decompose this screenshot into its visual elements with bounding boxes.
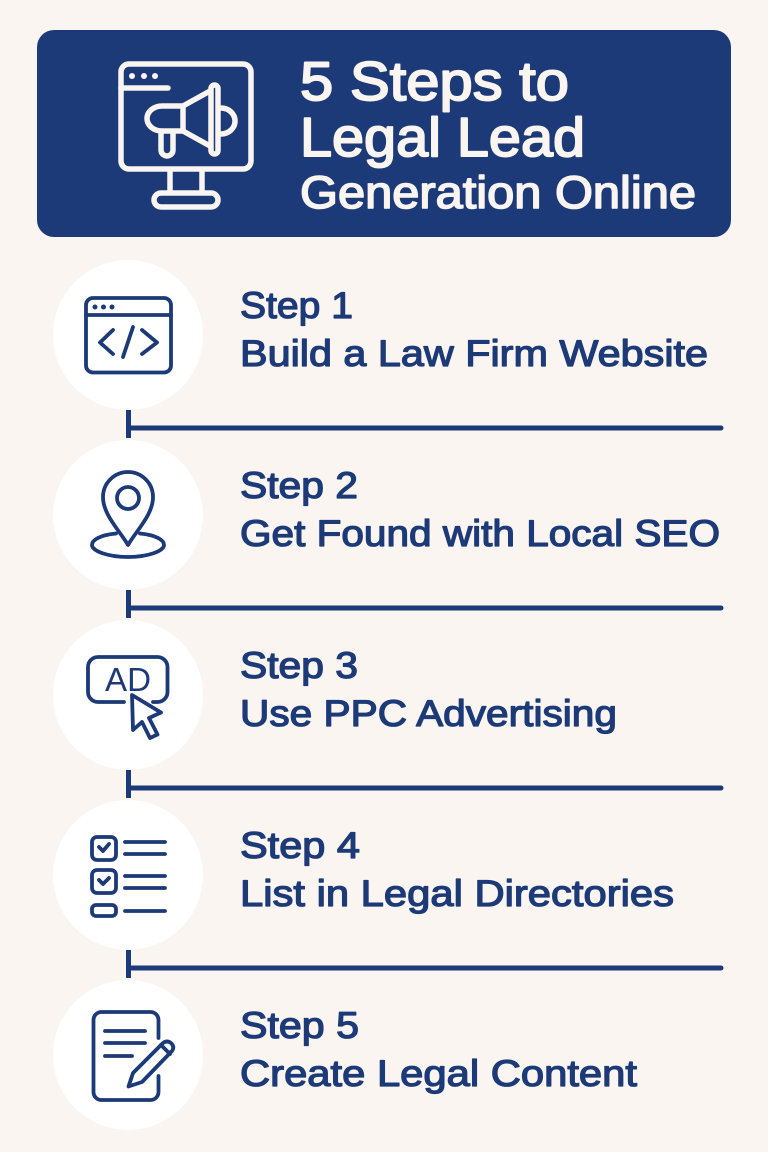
- icon: code window: [86, 298, 171, 372]
- icon: document and pencil: [94, 1012, 173, 1100]
- icon: AD click: [88, 657, 168, 738]
- step 2 text: Step 2: [240, 464, 358, 506]
- title: Generation Online: [300, 167, 696, 218]
- icon: checklist: [92, 837, 165, 916]
- step 5 text: [240, 1004, 638, 1094]
- step 3 text: Step 3: [240, 644, 358, 686]
- step 5 text: Step 5: [240, 1004, 359, 1046]
- icon: location pin: [92, 472, 164, 557]
- step 4 text: List in Legal Directories: [240, 872, 674, 914]
- step 3 text: [240, 644, 617, 734]
- icon: monitor with megaphone: [121, 64, 251, 207]
- step 2: [53, 440, 720, 590]
- step 5 text: Create Legal Content: [240, 1052, 638, 1094]
- step 3: [53, 620, 617, 770]
- title: 5 Steps to: [300, 50, 569, 112]
- step 5: [53, 980, 638, 1130]
- icon: AD click: AD: [105, 661, 151, 698]
- step 1: [53, 260, 708, 410]
- step 4 text: [240, 824, 674, 914]
- header banner: [37, 30, 731, 237]
- step 1 text: Step 1: [240, 284, 353, 326]
- step 1 text: [240, 284, 708, 374]
- step 4: [53, 800, 674, 950]
- title: [300, 50, 696, 218]
- step 2 text: Get Found with Local SEO: [240, 512, 720, 554]
- connector lines: [128, 410, 721, 978]
- step 2 text: [240, 464, 720, 554]
- step 3 text: Use PPC Advertising: [240, 692, 617, 734]
- step 1 text: Build a Law Firm Website: [240, 332, 708, 374]
- step 4 text: Step 4: [240, 824, 360, 866]
- title: Legal Lead: [300, 106, 585, 168]
